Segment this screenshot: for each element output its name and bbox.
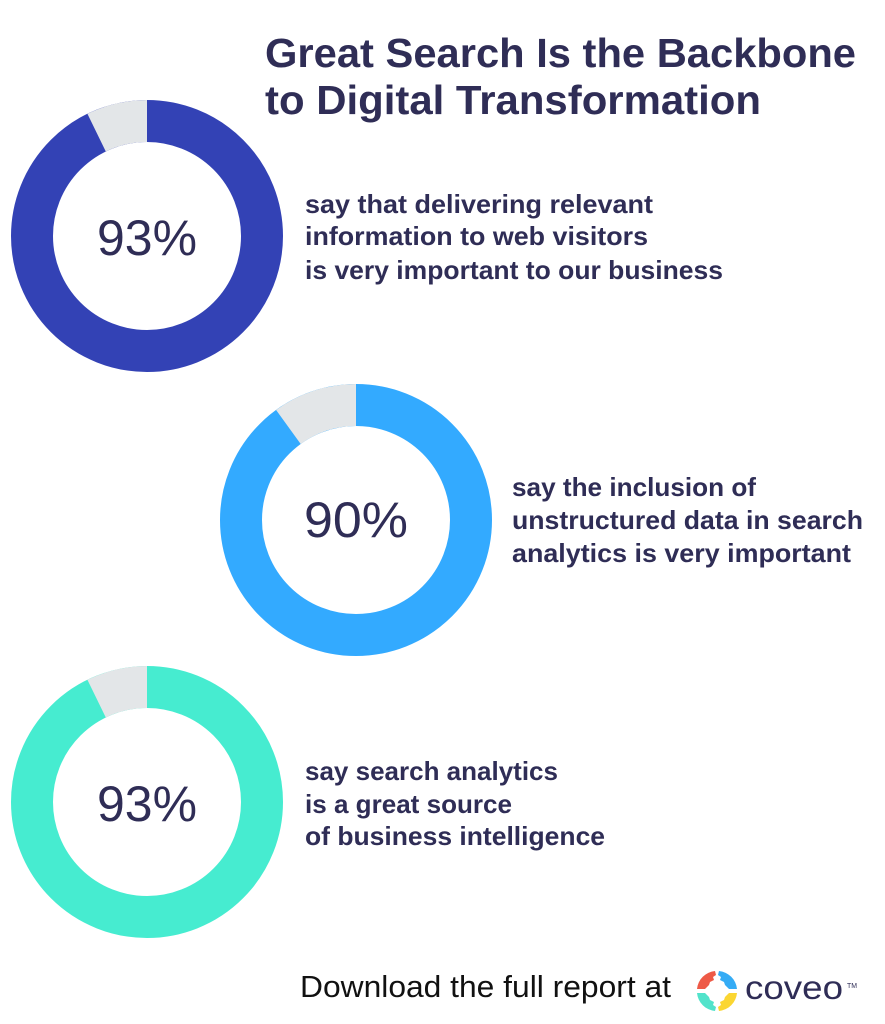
logo: coveo: TM bbox=[847, 983, 857, 990]
text block: business intelligence bbox=[305, 756, 605, 851]
donut chart: 93% teal: 93% bbox=[97, 776, 197, 832]
text block: relevant information: say that delivering relevant bbox=[305, 189, 653, 219]
download call to action: Download the full report at bbox=[300, 969, 671, 1004]
text block: relevant information: information to web visitors bbox=[305, 221, 648, 251]
donut chart: 90% light blue bbox=[241, 384, 471, 635]
donut chart: 93% dark blue bbox=[32, 100, 262, 351]
title: to Digital Transformation bbox=[265, 77, 761, 123]
donut chart: 90% light blue: 90% bbox=[304, 492, 408, 548]
title bbox=[265, 30, 856, 123]
text block: relevant information: is very important to our business bbox=[305, 255, 723, 285]
text block: unstructured data bbox=[512, 472, 863, 568]
text block: business intelligence: is a great source bbox=[305, 789, 512, 819]
logo: coveo: coveo bbox=[745, 969, 843, 1006]
logo: coveo bbox=[697, 969, 857, 1011]
donut chart: 93% dark blue: 93% bbox=[97, 210, 197, 266]
text block: unstructured data: unstructured data in search bbox=[512, 505, 863, 535]
title: Great Search Is the Backbone bbox=[265, 30, 856, 76]
icon: coveo hands mark bbox=[697, 971, 737, 1011]
text block: business intelligence: of business intelligence bbox=[305, 821, 605, 851]
donut chart: 93% teal bbox=[32, 666, 262, 917]
text block: relevant information bbox=[305, 189, 723, 285]
text block: business intelligence: say search analytics bbox=[305, 756, 558, 786]
text block: unstructured data: analytics is very important bbox=[512, 538, 851, 568]
text block: unstructured data: say the inclusion of bbox=[512, 472, 756, 502]
